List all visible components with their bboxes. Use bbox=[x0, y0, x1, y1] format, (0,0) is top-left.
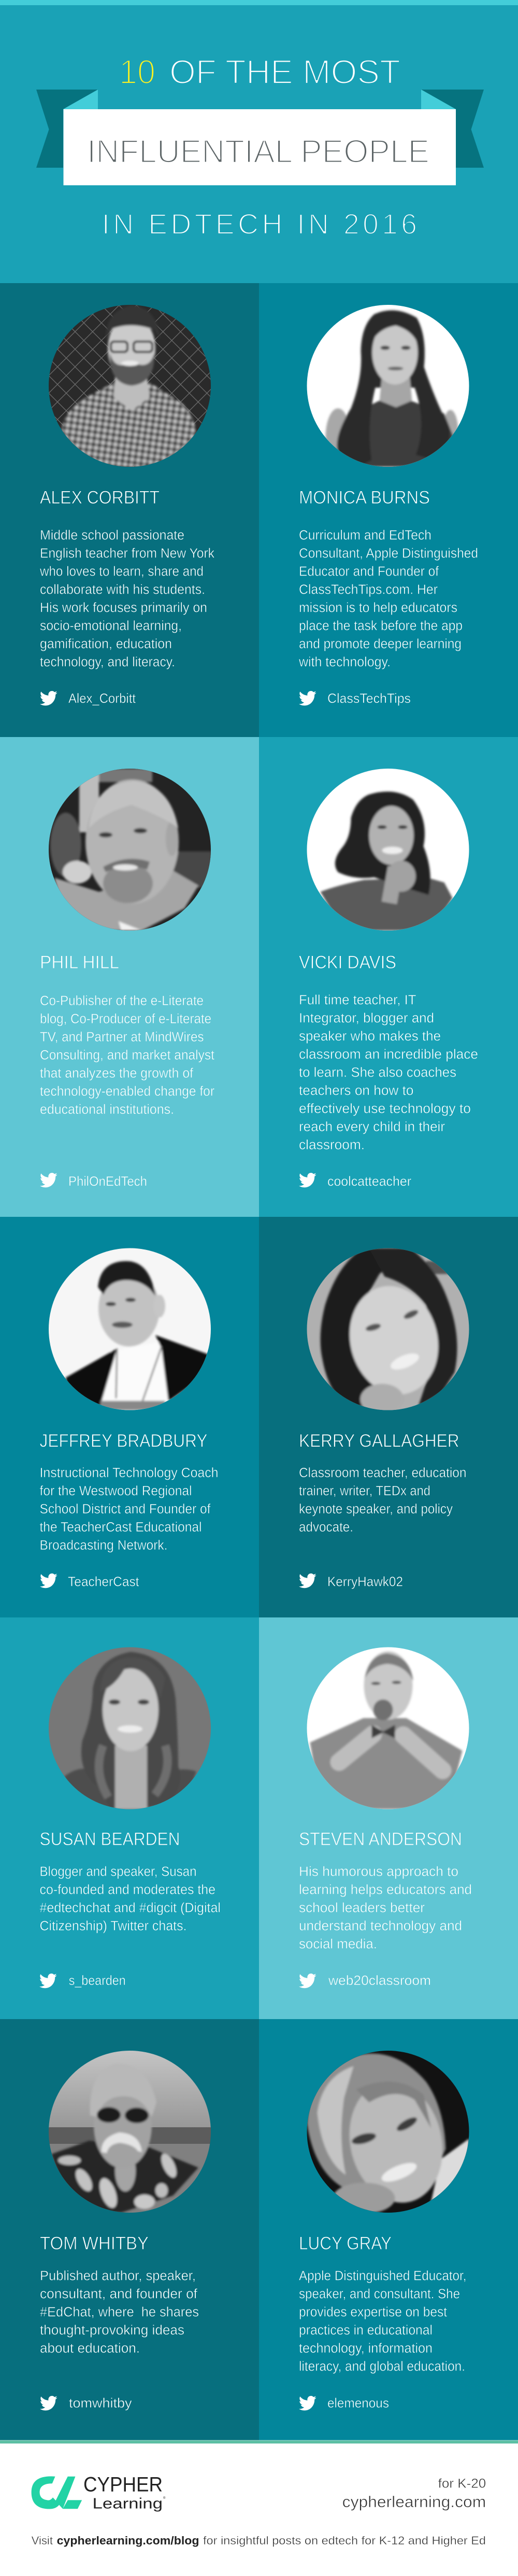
bio text: #edtechchat and #digcit (Digital bbox=[39, 1901, 221, 1915]
bio text: Curriculum and EdTech bbox=[299, 528, 431, 542]
panel: Lucy Gray bbox=[259, 2019, 518, 2440]
photo: Lucy Gray bbox=[307, 2051, 469, 2214]
ribbon bbox=[36, 90, 484, 185]
bio text: learning helps educators and bbox=[299, 1883, 472, 1897]
bio text: understand technology and bbox=[299, 1919, 462, 1934]
bio text bbox=[298, 528, 478, 670]
bio text: school leaders better bbox=[299, 1901, 425, 1915]
twitter handle: PhilOnEdTech bbox=[68, 1173, 147, 1189]
photo: Monica Burns bbox=[307, 305, 469, 467]
name: JEFFREY BRADBURY bbox=[39, 1431, 207, 1451]
bio text: that analyzes the growth of bbox=[40, 1066, 194, 1081]
bio text: practices in educational bbox=[299, 2323, 433, 2337]
blog line: for insightful posts on edtech for K-12 and Higher Ed bbox=[203, 2534, 486, 2547]
icon: twitter bird bbox=[40, 1573, 57, 1588]
name: VICKI DAVIS bbox=[299, 952, 396, 973]
bio text: Integrator, blogger and bbox=[299, 1011, 434, 1026]
name: STEVEN ANDERSON bbox=[299, 1829, 462, 1849]
panel: Phil Hill bbox=[0, 737, 259, 1217]
bio text: Apple Distinguished Educator, bbox=[299, 2269, 466, 2284]
bio text: Educator and Founder of bbox=[299, 564, 439, 579]
bio text: and promote deeper learning bbox=[299, 637, 462, 651]
bio text: blog, Co-Producer of e-Literate bbox=[40, 1012, 211, 1026]
bio text: ClassTechTips.com. Her bbox=[299, 583, 438, 597]
photo: Alex Corbitt bbox=[49, 305, 211, 467]
panel: Steven Anderson bbox=[259, 1617, 518, 2019]
blog line bbox=[32, 2534, 486, 2547]
bio text: to learn. She also coaches bbox=[299, 1065, 456, 1080]
bio text: technology-enabled change for bbox=[40, 1084, 214, 1099]
panel: Susan Bearden bbox=[0, 1617, 259, 2019]
bio text: TV, and Partner at MindWires bbox=[40, 1030, 204, 1044]
bio text: socio-emotional learning, bbox=[40, 619, 182, 634]
photo: Susan Bearden bbox=[49, 1647, 211, 1809]
photo: Jeffrey Bradbury bbox=[49, 1248, 211, 1410]
twitter handle: coolcatteacher bbox=[327, 1173, 411, 1189]
logo wordmark: ® bbox=[163, 2496, 166, 2500]
bio text: social media. bbox=[299, 1937, 377, 1951]
logo mark bbox=[32, 2476, 82, 2509]
name: TOM WHITBY bbox=[40, 2233, 149, 2254]
bio text: with technology. bbox=[298, 655, 391, 670]
bio text: mission is to help educators bbox=[299, 600, 457, 615]
logo wordmark bbox=[83, 2473, 166, 2512]
logo wordmark: Learning bbox=[92, 2496, 163, 2512]
bio text: classroom. bbox=[299, 1138, 365, 1152]
bio text: keynote speaker, and policy bbox=[299, 1502, 453, 1517]
bio text: effectively use technology to bbox=[299, 1101, 471, 1116]
bio text: teachers on how to bbox=[299, 1084, 413, 1098]
bio text: advocate. bbox=[299, 1520, 353, 1535]
twitter handle: elemenous bbox=[327, 2395, 389, 2411]
panel: Jeffrey Bradbury bbox=[0, 1217, 259, 1617]
bio text: technology, and literacy. bbox=[40, 655, 175, 670]
title line: in edtech in 2016: IN EDTECH IN 2016 bbox=[102, 208, 417, 240]
panel: Alex Corbitt bbox=[0, 283, 259, 737]
bio text: His work focuses primarily on bbox=[40, 600, 207, 615]
bio text: English teacher from New York bbox=[40, 547, 214, 561]
bio text: consultant, and founder of bbox=[40, 2287, 198, 2301]
bio text bbox=[40, 2269, 199, 2356]
bio text: Full time teacher, IT bbox=[299, 993, 416, 1007]
bio text: thought-provoking ideas bbox=[40, 2323, 184, 2337]
bio text: Consulting, and market analyst bbox=[40, 1048, 214, 1063]
bio text: speaker, and consultant. She bbox=[299, 2287, 460, 2301]
bio text: classroom an incredible place bbox=[299, 1048, 478, 1062]
bio text: technology, information bbox=[299, 2342, 433, 2356]
icon: twitter bird bbox=[39, 1974, 57, 1988]
panel: Tom Whitby bbox=[0, 2019, 259, 2440]
panel: Monica Burns bbox=[259, 283, 518, 737]
name: MONICA BURNS bbox=[299, 488, 430, 508]
bio text: School District and Founder of bbox=[39, 1502, 211, 1517]
twitter handle: Alex_Corbitt bbox=[68, 690, 136, 706]
icon: twitter bird bbox=[299, 1573, 316, 1588]
icon: twitter bird bbox=[40, 2396, 57, 2410]
bio text: Instructional Technology Coach bbox=[39, 1466, 219, 1480]
bio text: Classroom teacher, education bbox=[299, 1466, 466, 1480]
bio text: literacy, and global education. bbox=[299, 2359, 465, 2374]
for K-20 text: for K-20 bbox=[438, 2477, 486, 2491]
name: ALEX CORBITT bbox=[40, 488, 160, 508]
bio text bbox=[299, 1466, 466, 1535]
bio text: Blogger and speaker, Susan bbox=[39, 1864, 197, 1879]
bio text: trainer, writer, TEDx and bbox=[299, 1484, 430, 1498]
icon: twitter bird bbox=[299, 1974, 316, 1988]
bio text bbox=[299, 1864, 472, 1951]
bio text bbox=[39, 528, 214, 670]
bio text: Published author, speaker, bbox=[40, 2269, 196, 2284]
bio text: the TeacherCast Educational bbox=[39, 1520, 202, 1535]
bio text: who loves to learn, share and bbox=[39, 564, 204, 579]
bio text: Middle school passionate bbox=[40, 528, 184, 542]
photo: Steven Anderson bbox=[307, 1647, 469, 1809]
bio text: about education. bbox=[40, 2342, 140, 2356]
twitter handle: ClassTechTips bbox=[327, 690, 411, 706]
title line: influential people: INFLUENTIAL PEOPLE bbox=[87, 134, 429, 170]
bio text: Citizenship) Twitter chats. bbox=[39, 1919, 186, 1934]
icon: twitter bird bbox=[299, 1173, 316, 1187]
bio text: co-founded and moderates the bbox=[39, 1883, 215, 1897]
twitter handle: web20classroom bbox=[328, 1973, 431, 1988]
icon: twitter bird bbox=[299, 691, 316, 705]
icon: twitter bird bbox=[40, 691, 57, 705]
panel: Kerry Gallagher bbox=[259, 1217, 518, 1617]
blog line: Visit bbox=[32, 2534, 53, 2547]
icon: twitter bird bbox=[299, 2396, 316, 2410]
bio text: provides expertise on best bbox=[299, 2305, 447, 2320]
photo: Vicki Davis bbox=[307, 769, 469, 931]
bio text: collaborate with his students. bbox=[40, 583, 205, 597]
bio text: Consultant, Apple Distinguished bbox=[299, 547, 478, 561]
bio text: gamification, education bbox=[40, 637, 172, 651]
twitter handle: tomwhitby bbox=[69, 2395, 132, 2411]
name: KERRY GALLAGHER bbox=[299, 1431, 459, 1451]
twitter handle: TeacherCast bbox=[68, 1573, 139, 1589]
photo: Tom Whitby bbox=[49, 2051, 211, 2213]
bio text: His humorous approach to bbox=[299, 1864, 458, 1879]
panel: Vicki Davis bbox=[259, 737, 518, 1217]
blog line: cypherlearning.com/blog bbox=[57, 2534, 199, 2547]
photo: Kerry Gallagher bbox=[307, 1248, 469, 1415]
bio text: for the Westwood Regional bbox=[39, 1484, 192, 1498]
icon: twitter bird bbox=[40, 1173, 57, 1187]
photo: Phil Hill bbox=[49, 769, 212, 931]
bio text: #EdChat, where he shares bbox=[40, 2305, 199, 2320]
bio text: Broadcasting Network. bbox=[39, 1538, 168, 1553]
bio text bbox=[39, 1466, 219, 1553]
bio text bbox=[40, 994, 214, 1117]
bio text bbox=[299, 2269, 466, 2374]
footer panel bbox=[0, 2440, 518, 2547]
website url: cypherlearning.com bbox=[342, 2493, 486, 2511]
name: SUSAN BEARDEN bbox=[39, 1829, 180, 1849]
bio text: speaker who makes the bbox=[299, 1029, 441, 1043]
bio text: place the task before the app bbox=[299, 619, 463, 634]
name: LUCY GRAY bbox=[299, 2233, 392, 2254]
title line: 10 of the most: OF THE MOST bbox=[169, 53, 400, 91]
bio text bbox=[39, 1864, 221, 1934]
twitter handle: KerryHawk02 bbox=[327, 1573, 403, 1589]
bio text: reach every child in their bbox=[299, 1120, 445, 1135]
logo wordmark: CYPHER bbox=[83, 2473, 163, 2496]
bio text: Co-Publisher of the e-Literate bbox=[40, 994, 204, 1008]
title line: 10 of the most: 10 bbox=[119, 53, 155, 91]
bio text: educational institutions. bbox=[40, 1102, 174, 1117]
bio text bbox=[299, 993, 478, 1152]
header panel bbox=[0, 0, 518, 284]
name: PHIL HILL bbox=[40, 952, 119, 973]
twitter handle: s_bearden bbox=[69, 1973, 126, 1988]
